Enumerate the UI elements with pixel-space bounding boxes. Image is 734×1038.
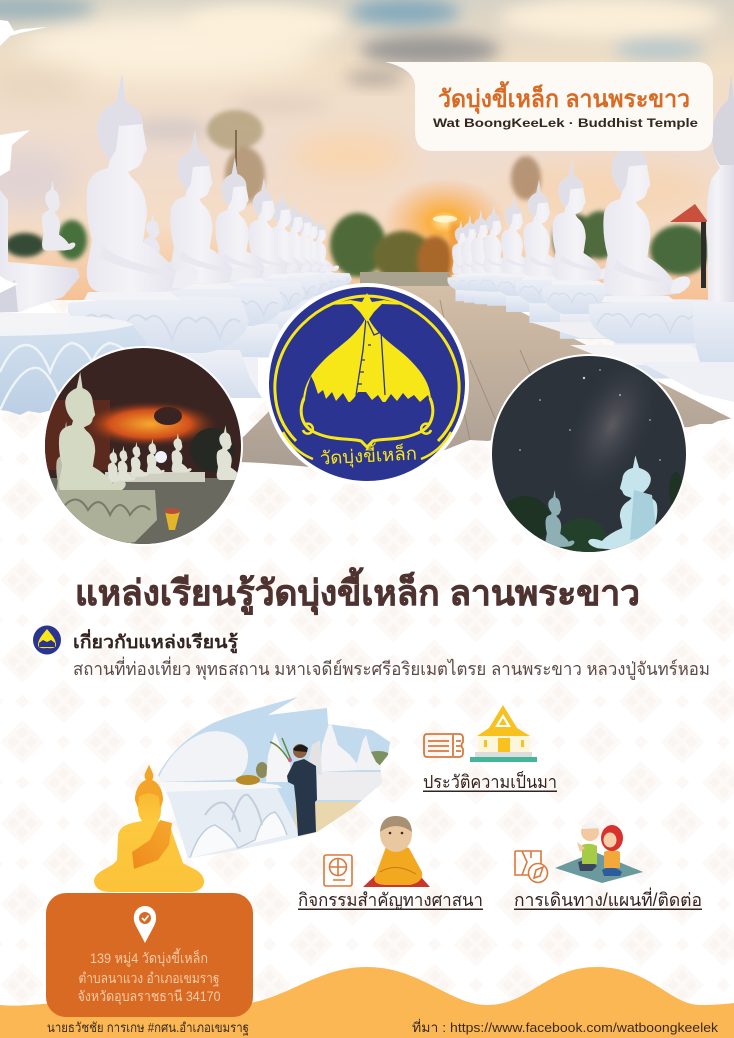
- white lotus pedestal: [162, 788, 300, 860]
- lower outline with notch: [301, 398, 433, 447]
- link: activities: กิจกรรมสำคัญทางศาสนา: [298, 890, 483, 910]
- right circle photo: milky way over statue: [490, 354, 688, 552]
- sky with clouds: [0, 0, 734, 300]
- beige ground: [295, 802, 360, 835]
- distant white statues: [317, 772, 382, 800]
- left circle photo: fiery sky night: [40, 345, 250, 550]
- icon: seated monk: [363, 816, 430, 887]
- top crest: [325, 293, 409, 322]
- address text: ตำบลนาแวง อำเภอเขมราฐ: [78, 970, 220, 987]
- left statue row: [42, 73, 355, 398]
- location pin icon: [134, 906, 156, 943]
- hero photo: white Buddha statues at sunset: [0, 0, 734, 480]
- temple skyline silhouette: [304, 376, 431, 420]
- bubble English subtitle: Wat BoongKeeLek · Buddhist Temple: [433, 116, 698, 130]
- icon: Thai temple: [470, 705, 537, 762]
- orange wave footer band: [0, 967, 734, 1038]
- yellow ring: [275, 296, 459, 441]
- golden Buddha figure: [94, 765, 204, 892]
- icon: passport: [324, 855, 352, 886]
- stupa tower: [356, 318, 385, 395]
- address text: [78, 948, 221, 1005]
- sun and glow: [387, 180, 503, 252]
- address card: [46, 893, 253, 1017]
- bubble Thai heading: วัดบุ่งขี้เหล็ก ลานพระขาว: [438, 80, 690, 115]
- man praying: [270, 738, 317, 836]
- title bubble: [385, 62, 713, 151]
- torn white specks on left edge: [0, 20, 48, 293]
- about description: สถานที่ท่องเที่ยว พุทธสถาน มหาเจดีย์พระศรีอริยเมตไตรย ลานพระขาว หลวงปู่จันทร์หอม: [73, 656, 710, 680]
- link: directions: การเดินทาง/แผนที่/ติดต่อ: [514, 887, 702, 910]
- ground walkway: [242, 286, 731, 467]
- author credit: นายธวัชชัย การเกษ #กศน.อำเภอเขมราฐ: [47, 1020, 249, 1036]
- right statue row: [448, 75, 734, 402]
- address text: จังหวัดอุบลราชธานี 34170: [78, 988, 221, 1005]
- foreground statue and lotus base: [0, 190, 147, 420]
- main heading: แหล่งเรียนรู้วัดบุ่งขี้เหล็ก ลานพระขาว: [75, 567, 640, 615]
- trees: [5, 110, 710, 286]
- pavilion: [670, 204, 708, 288]
- flame teardrop: [303, 315, 431, 402]
- icon: praying children: [555, 822, 643, 883]
- icon: map and compass: [515, 851, 548, 882]
- temple emblem logo: [265, 283, 469, 485]
- rounded knee: [157, 731, 248, 782]
- emblem lettering: วัดบุ่งขี้เหล็ก: [319, 440, 417, 469]
- icon: ticket: [424, 734, 463, 757]
- link: history: ประวัติความเป็นมา: [423, 770, 557, 792]
- source credit: ที่มา : https://www.facebook.com/watboongkeelek: [412, 1019, 719, 1035]
- address text: 139 หมู่4 วัดบุ่งขี้เหล็ก: [90, 948, 208, 967]
- side ornaments: [283, 424, 451, 459]
- brush photo: visitor praying at lotus base: [158, 697, 390, 858]
- small logo icon: [33, 626, 61, 654]
- distant trees: [371, 751, 388, 765]
- about heading: เกี่ยวกับแหล่งเรียนรู้: [73, 629, 238, 654]
